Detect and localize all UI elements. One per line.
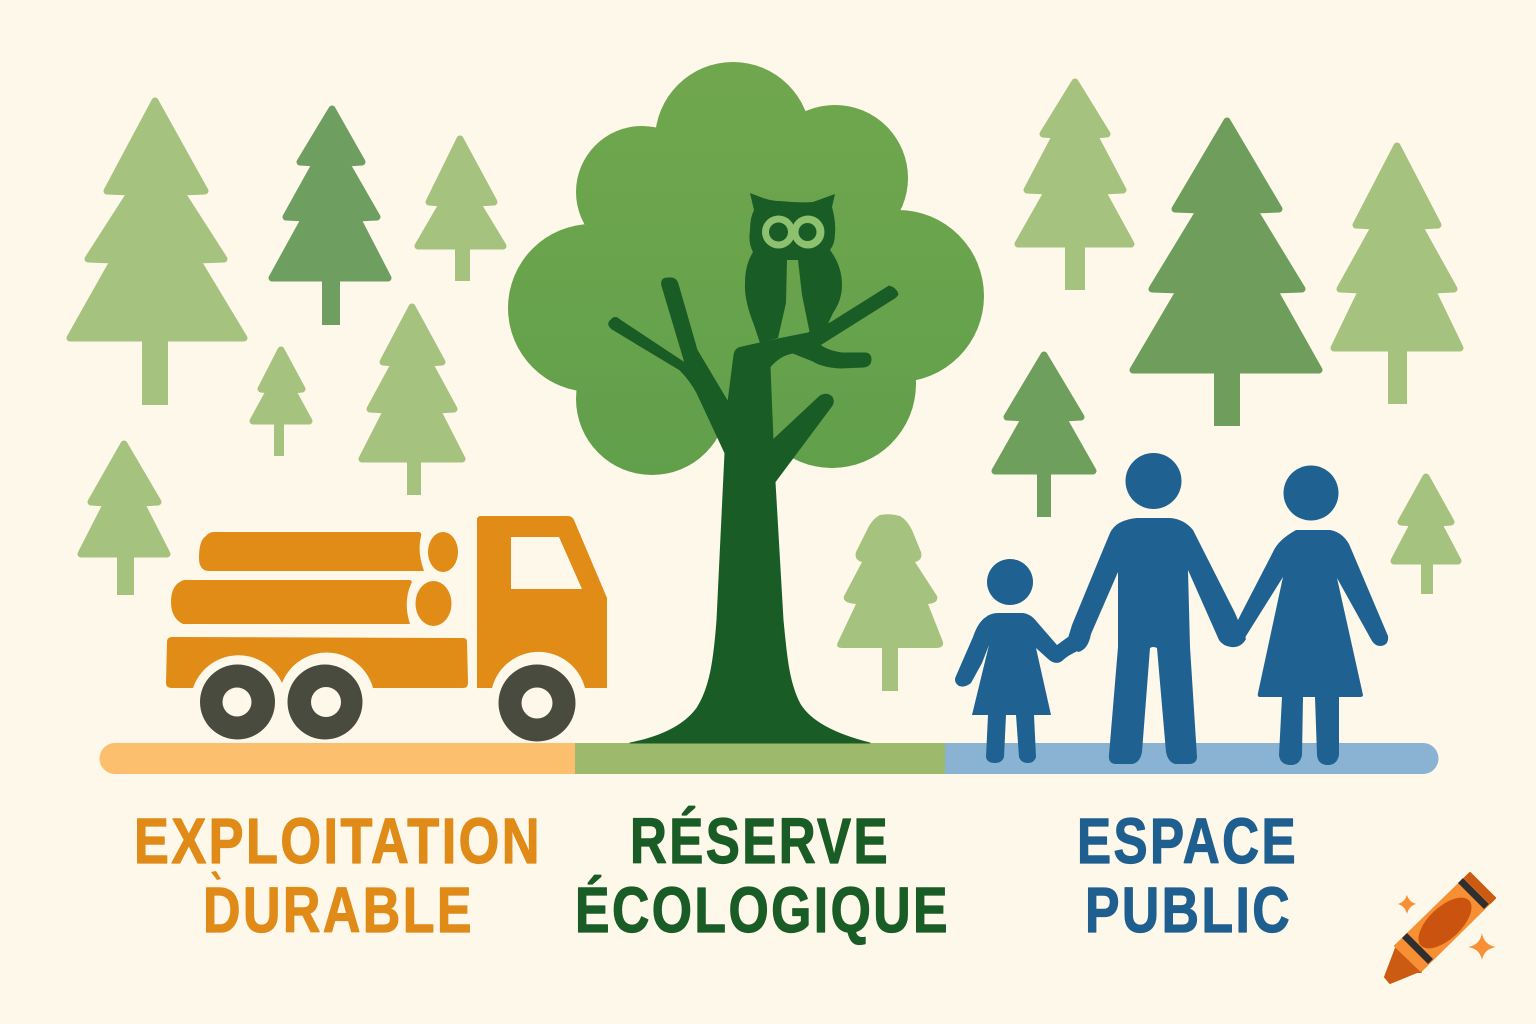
tree: small light conifer right <box>1394 477 1458 594</box>
tree: medium light conifer <box>362 307 462 495</box>
tree: large light conifer <box>70 101 244 405</box>
label: réserve écologique: ÉCOLOGIQUE <box>575 874 950 946</box>
log: upper <box>199 532 458 572</box>
crayon band bottom <box>1402 933 1433 964</box>
label: exploitation durable: EXPLOITATION <box>134 805 542 877</box>
truck cab <box>477 516 607 688</box>
owl <box>745 193 842 343</box>
forest: left conifers <box>70 101 503 595</box>
icon: logging truck <box>166 516 607 742</box>
label: espace public: PUBLIC <box>1085 874 1292 946</box>
tree: light conifer far right <box>1334 146 1460 404</box>
tree: small light conifer top <box>418 139 503 281</box>
tree: mid-green small conifer <box>995 355 1093 517</box>
tree: mid-green conifer <box>272 109 388 325</box>
log: lower <box>171 580 452 626</box>
tree: tiny light conifer <box>253 350 309 456</box>
label: réserve écologique <box>575 805 950 946</box>
father <box>1068 453 1246 764</box>
tree: low light conifer <box>81 444 167 595</box>
label: exploitation durable: DURABLE <box>203 874 474 946</box>
ground bar: three segments <box>99 743 1438 774</box>
tree: large mid-green conifer <box>1133 121 1319 426</box>
forest: right conifers <box>837 82 1460 691</box>
wheel: front <box>498 664 576 742</box>
owl eyes <box>762 216 824 248</box>
label: espace public: ESPACE <box>1077 805 1298 877</box>
crayon tip <box>1385 948 1421 983</box>
label: exploitation durable <box>134 805 542 946</box>
sparkle small <box>1398 895 1416 914</box>
tree crown <box>508 62 984 475</box>
crayon body <box>1395 873 1495 971</box>
sparkle large <box>1468 933 1496 960</box>
icon: family holding hands <box>955 453 1388 765</box>
icon: crayon with sparkles <box>1385 873 1496 983</box>
label: espace public <box>1077 805 1298 946</box>
wheel: rear one <box>200 664 275 740</box>
tree: rounded light conifer <box>837 514 943 691</box>
icon: central tree with owl <box>508 62 984 743</box>
truck bed <box>166 637 468 688</box>
tree trunk and branches <box>609 278 898 743</box>
child <box>955 559 1080 763</box>
crayon band top <box>1458 878 1489 909</box>
crayon end cap <box>1465 873 1495 903</box>
tree: tall light conifer <box>1018 82 1131 290</box>
crayon oval <box>1410 889 1480 957</box>
label: réserve écologique: RÉSERVE <box>630 805 890 877</box>
wheel: rear two <box>288 664 362 740</box>
mother <box>1233 466 1388 765</box>
